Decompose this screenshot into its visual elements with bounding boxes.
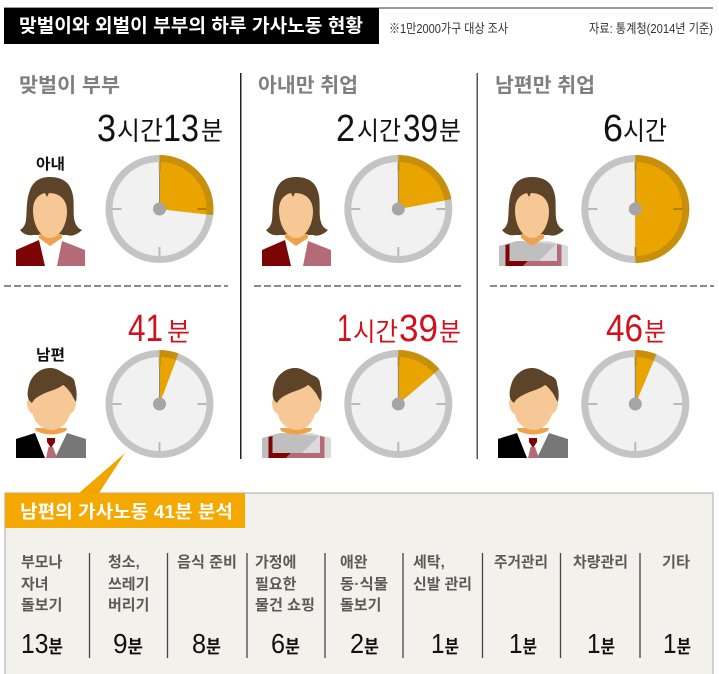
wife time xyxy=(336,108,461,150)
item: food preparation xyxy=(177,554,237,659)
column dividers and row separators xyxy=(4,73,714,459)
item: laundry and shoes: 세탁, xyxy=(413,554,445,571)
item: laundry and shoes xyxy=(413,554,472,659)
item: cleaning and trash xyxy=(108,554,149,659)
callout arrow xyxy=(79,453,125,493)
husband time: 1 xyxy=(337,308,352,350)
wife time: 39 xyxy=(403,108,438,150)
item: cleaning and trash: 청소, xyxy=(108,554,140,571)
husband time: 41 xyxy=(128,308,163,350)
heading: husband-only: 남편만 취업 xyxy=(495,74,595,97)
wife time: 2 xyxy=(336,108,355,150)
husband time xyxy=(337,308,461,350)
item: pets and plants: 애완 xyxy=(340,554,368,571)
husband label: 남편 xyxy=(36,347,65,364)
item: pets and plants: 돌보기 xyxy=(340,597,381,614)
item: pets and plants: 2분 xyxy=(350,628,379,659)
item: care for parents and children xyxy=(21,554,63,659)
clock: wife 2h39m xyxy=(348,155,451,260)
husband time: 시간 xyxy=(353,317,398,347)
item: care for parents and children: 돌보기 xyxy=(21,597,62,614)
survey note: ※1만2000가구 대상 조사 xyxy=(389,21,508,36)
item: vehicle management xyxy=(573,554,628,659)
item: laundry and shoes: 신발 관리 xyxy=(413,576,472,593)
icon: wife xyxy=(262,177,331,266)
item: other xyxy=(662,554,691,659)
item: pets and plants xyxy=(340,554,388,659)
wife time xyxy=(603,108,667,150)
husband time: 분 xyxy=(644,317,666,347)
item: household shopping: 6분 xyxy=(271,628,300,659)
icon: husband in apron xyxy=(262,368,331,458)
heading: dual-income: 맞벌이 부부 xyxy=(19,74,120,97)
item: care for parents and children: 자녀 xyxy=(21,576,49,593)
husband time: 39 xyxy=(399,308,438,350)
top rule xyxy=(4,8,713,9)
wife time: 시간 xyxy=(623,116,667,146)
husband time xyxy=(128,308,190,350)
item: cleaning and trash: 버리기 xyxy=(108,597,149,614)
item: vehicle management: 차량관리 xyxy=(573,554,628,571)
item: other: 1분 xyxy=(663,628,691,659)
husband time: 46 xyxy=(606,308,643,350)
column separators xyxy=(90,553,640,658)
wife time: 분 xyxy=(439,116,461,146)
item: vehicle management: 1분 xyxy=(587,628,615,659)
item: food preparation: 음식 준비 xyxy=(177,554,237,571)
icon: wife in apron xyxy=(499,177,568,266)
item: cleaning and trash: 9분 xyxy=(113,628,143,659)
item: pets and plants: 동·식물 xyxy=(340,576,388,593)
husband time: 분 xyxy=(167,317,190,347)
icon: husband xyxy=(16,368,86,458)
item: housing management: 1분 xyxy=(509,628,537,659)
wife time: 3 xyxy=(97,108,116,150)
item: other: 기타 xyxy=(662,554,690,571)
item: laundry and shoes: 1분 xyxy=(431,628,459,659)
wife time: 시간 xyxy=(357,116,401,146)
item: care for parents and children: 13분 xyxy=(21,628,63,659)
wife time xyxy=(97,108,223,150)
title bar xyxy=(4,8,379,44)
breakdown heading: 남편의 가사노동 41분 분석 xyxy=(20,502,233,522)
clock: husband 41m xyxy=(109,350,210,454)
clock: wife 3h13m xyxy=(109,155,213,260)
item: household shopping xyxy=(255,554,315,659)
item: household shopping: 물건 쇼핑 xyxy=(255,597,315,614)
clock: husband 46m xyxy=(585,350,686,454)
panel: husband-only employed xyxy=(495,74,689,458)
item: housing management: 주거관리 xyxy=(494,554,548,571)
wife time: 분 xyxy=(201,116,223,146)
icon: wife xyxy=(16,177,85,266)
panel: dual-income couples xyxy=(16,74,223,458)
breakdown heading xyxy=(5,493,245,528)
husband time: 분 xyxy=(439,317,461,347)
item: housing management xyxy=(494,554,548,659)
clock: husband 1h39m xyxy=(348,350,449,454)
wife label: 아내 xyxy=(36,156,65,173)
icon: husband xyxy=(498,368,568,458)
wife time: 시간 xyxy=(117,116,163,146)
wife time: 13 xyxy=(163,108,199,150)
panel: wife-only employed xyxy=(258,74,461,458)
title bar: 맞벌이와 외벌이 부부의 하루 가사노동 현황 xyxy=(19,15,363,37)
wife time: 6 xyxy=(603,108,623,150)
item: household shopping: 가정에 xyxy=(255,554,296,571)
heading: wife-only: 아내만 취업 xyxy=(258,74,358,97)
clock: wife 6h xyxy=(585,155,689,263)
item: care for parents and children: 부모나 xyxy=(21,554,63,571)
panel: breakdown of husband's 41 minutes xyxy=(5,453,713,674)
item: household shopping: 필요한 xyxy=(255,576,297,593)
item: cleaning and trash: 쓰레기 xyxy=(108,576,149,593)
item: food preparation: 8분 xyxy=(192,628,221,659)
